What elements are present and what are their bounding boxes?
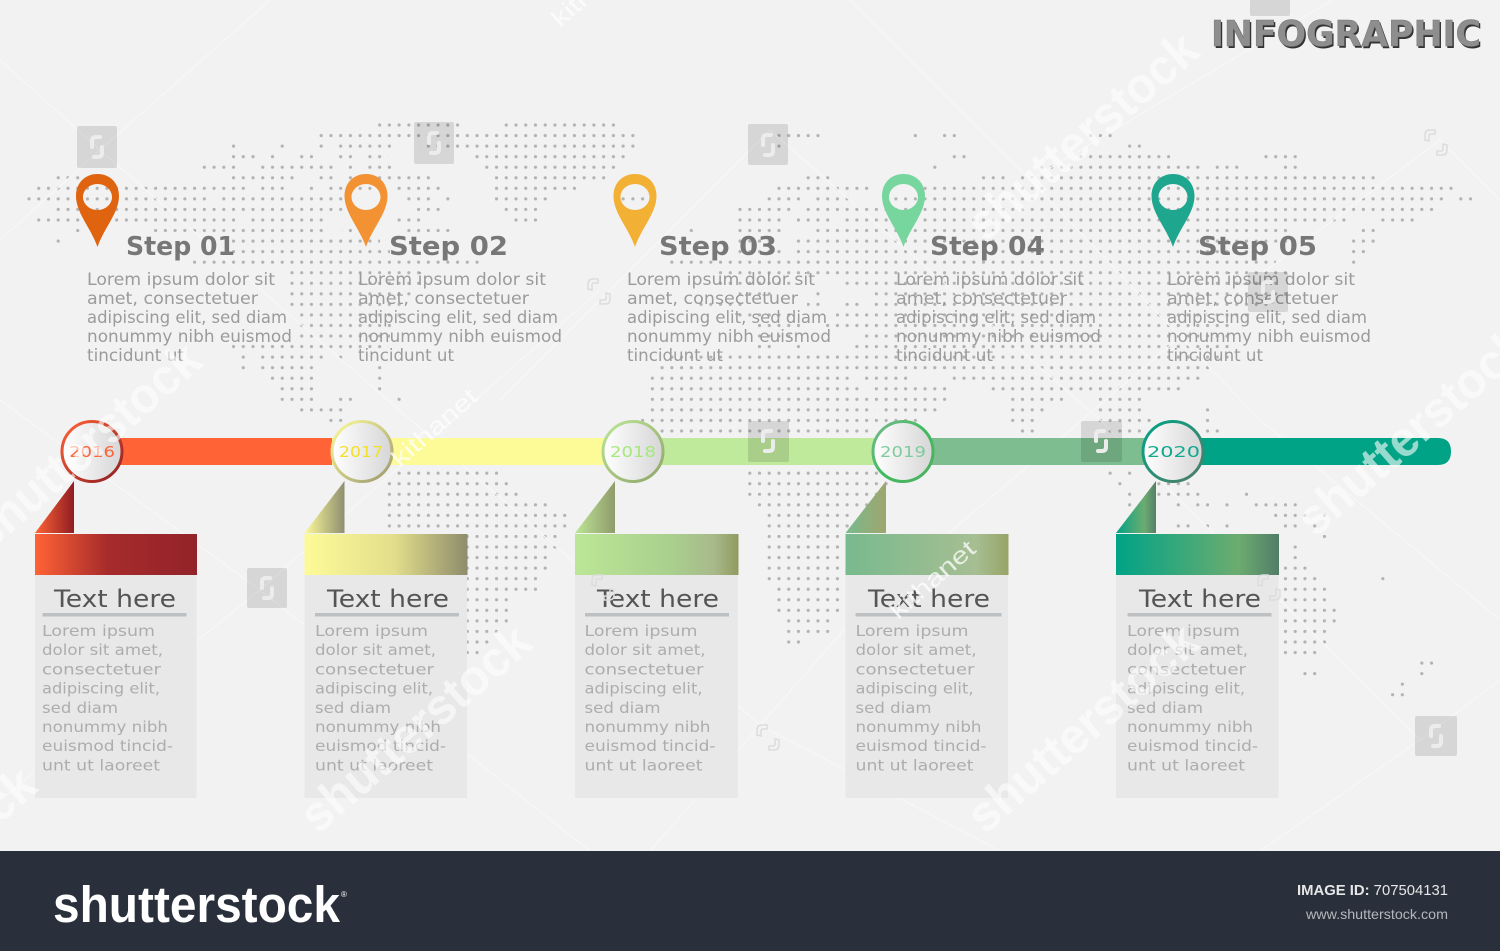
icon: pin 02 <box>344 174 388 247</box>
flag fold 2018 <box>575 481 615 533</box>
timeline marker 2017 <box>332 422 392 482</box>
card text 2016: euismod tincid- <box>42 737 173 755</box>
card text 2019: unt ut laoreet <box>856 756 974 774</box>
card body 2018 <box>575 575 738 798</box>
footer url: www.shutterstock.com <box>1305 906 1448 922</box>
text block: step 01 description: amet, consectetuer <box>87 289 258 308</box>
text block: step 05 description: amet, consectetuer <box>1167 289 1338 308</box>
footer logo: shutterstock <box>53 876 341 933</box>
text block: step 03 description: Lorem ipsum dolor sit <box>627 270 816 289</box>
heading: Step 05: Step 05 <box>1198 232 1317 262</box>
watermark squares <box>77 0 1457 756</box>
card text 2016: consectetuer <box>42 660 162 678</box>
card underline 2019 <box>856 613 1002 616</box>
card body 2017 <box>304 575 467 798</box>
timeline marker 2017: 2017 <box>339 443 383 461</box>
timeline marker 2016 <box>62 422 122 482</box>
card text 2017: unt ut laoreet <box>315 756 433 774</box>
flag fold 2017 <box>304 481 344 533</box>
text block: step 05 description: tincidunt ut <box>1167 346 1264 365</box>
text block: step 02 description <box>358 270 562 365</box>
card text 2016: adipiscing elit, <box>42 680 160 698</box>
card heading 2016: Text here <box>53 585 176 613</box>
timeline bar <box>92 438 1451 465</box>
card text 2016: unt ut laoreet <box>42 756 160 774</box>
card text 2020: dolor sit amet, <box>1127 641 1248 659</box>
card underline 2018 <box>585 613 729 616</box>
card text 2019: adipiscing elit, <box>856 680 974 698</box>
card text 2020: euismod tincid- <box>1127 737 1258 755</box>
heading: Step 03: Step 03 <box>659 232 777 262</box>
card heading 2017: Text here <box>326 585 449 613</box>
card text 2020: adipiscing elit, <box>1127 680 1245 698</box>
text block: step 02 description: adipiscing elit, sed diam <box>358 308 558 327</box>
card heading 2018: Text here <box>596 585 719 613</box>
text block: step 01 description <box>87 270 292 365</box>
card text 2017: sed diam <box>315 699 391 717</box>
timeline marker 2016: 2016 <box>69 443 115 461</box>
step 05 column <box>1152 174 1371 365</box>
text block: step 01 description: adipiscing elit, sed diam <box>87 308 287 327</box>
icon: pin 03 <box>614 174 656 247</box>
card text 2017 <box>315 622 446 774</box>
footer registered mark: ® <box>341 890 347 899</box>
card text 2018: sed diam <box>584 699 660 717</box>
card text 2016: dolor sit amet, <box>42 641 163 659</box>
watermark text: kithanet <box>884 535 981 625</box>
icon: pin 01 <box>76 174 119 247</box>
icon: pin 05 <box>1152 174 1194 247</box>
card text 2020 <box>1127 622 1258 774</box>
dotted world map <box>28 125 1472 695</box>
text block: step 04 description: tincidunt ut <box>896 346 994 365</box>
card text 2019: euismod tincid- <box>856 737 986 755</box>
heading: Step 02: Step 02 <box>389 232 508 262</box>
card text 2017: adipiscing elit, <box>315 680 433 698</box>
flag fold 2019 <box>846 481 886 533</box>
card text 2016: sed diam <box>42 699 118 717</box>
step 02 column <box>344 174 562 365</box>
watermark text: shutterstock <box>955 613 1209 843</box>
footer image id: IMAGE ID: 707504131 <box>1297 882 1448 899</box>
panel: card 2018 <box>575 481 738 798</box>
flag band 2016 <box>35 534 197 575</box>
text block: step 01 description: tincidunt ut <box>87 346 185 365</box>
text block: step 02 description: amet, consectetuer <box>358 289 529 308</box>
watermark text: shutterstock <box>288 613 542 843</box>
flag band 2017 <box>304 534 468 575</box>
card body 2016 <box>35 575 196 798</box>
footer band <box>0 851 1500 951</box>
text block: step 02 description: Lorem ipsum dolor sit <box>358 270 547 289</box>
card underline 2020 <box>1128 613 1272 616</box>
card body 2019 <box>846 575 1008 798</box>
card text 2018: dolor sit amet, <box>584 641 706 659</box>
card text 2017: consectetuer <box>315 660 435 678</box>
watermark square glyphs <box>92 133 1441 746</box>
timeline marker 2018: 2018 <box>610 443 656 461</box>
card text 2018: euismod tincid- <box>584 737 716 755</box>
flag fold 2020 <box>1116 481 1156 533</box>
text block: step 03 description: adipiscing elit, sed diam <box>627 308 827 327</box>
text block: step 01 description: Lorem ipsum dolor sit <box>87 270 276 289</box>
card text 2019: Lorem ipsum <box>856 622 968 640</box>
card text 2016 <box>42 622 173 774</box>
card text 2018: consectetuer <box>584 660 704 678</box>
card underline 2017 <box>315 613 459 616</box>
card heading 2019: Text here <box>867 585 990 613</box>
panel: card 2017 <box>304 481 468 798</box>
icon: pin 04 <box>882 174 925 247</box>
card text 2017: nonummy nibh <box>315 718 441 736</box>
card text 2018: unt ut laoreet <box>584 756 702 774</box>
text block: step 03 description: tincidunt ut <box>627 346 724 365</box>
title: INFOGRAPHIC: INFOGRAPHIC <box>1211 14 1481 55</box>
text block: step 03 description: amet, consectetuer <box>627 289 798 308</box>
text block: step 04 description: Lorem ipsum dolor sit <box>896 270 1085 289</box>
flag band 2018 <box>575 534 738 575</box>
text block: step 04 description <box>896 270 1101 365</box>
timeline marker 2018 <box>603 422 663 482</box>
card text 2017: euismod tincid- <box>315 737 446 755</box>
text block: step 03 description <box>627 270 831 365</box>
card text 2016: Lorem ipsum <box>42 622 155 640</box>
card text 2017: dolor sit amet, <box>315 641 436 659</box>
panel: card 2019 <box>846 481 1008 798</box>
flag fold 2016 <box>35 481 74 533</box>
text block: step 05 description: adipiscing elit, sed diam <box>1167 308 1367 327</box>
text block: step 02 description: nonummy nibh euismod <box>358 327 562 346</box>
text block: step 03 description: nonummy nibh euismod <box>627 327 831 346</box>
text block: step 05 description: nonummy nibh euismod <box>1167 327 1371 346</box>
timeline marker 2020: 2020 <box>1147 443 1200 461</box>
panel: card 2020 <box>1116 481 1279 798</box>
watermark text: shutterstock <box>955 21 1209 251</box>
text block: step 04 description: nonummy nibh euismod <box>896 327 1101 346</box>
card text 2018: nonummy nibh <box>584 718 710 736</box>
timeline marker 2019 <box>873 422 933 482</box>
step 04 column <box>882 174 1101 365</box>
text block: step 04 description: adipiscing elit, sed diam <box>896 308 1096 327</box>
card body 2020 <box>1116 575 1278 798</box>
flag band 2019 <box>846 534 1008 575</box>
heading: Step 04: Step 04 <box>930 232 1045 262</box>
timeline marker 2020 <box>1143 422 1203 482</box>
text block: step 01 description: nonummy nibh euismod <box>87 327 292 346</box>
text block: step 02 description: tincidunt ut <box>358 346 455 365</box>
flag band 2020 <box>1116 534 1279 575</box>
card text 2019: nonummy nibh <box>856 718 982 736</box>
card text 2020: unt ut laoreet <box>1127 756 1245 774</box>
card text 2019: sed diam <box>856 699 932 717</box>
title: INFOGRAPHIC: INFOGRAPHIC <box>1212 16 1482 57</box>
card text 2018: adipiscing elit, <box>584 680 702 698</box>
card underline 2016 <box>42 613 186 616</box>
card text 2018 <box>584 622 716 774</box>
card text 2020: nonummy nibh <box>1127 718 1253 736</box>
heading: Step 01: Step 01 <box>126 232 235 262</box>
card text 2017: Lorem ipsum <box>315 622 428 640</box>
text block: step 05 description: Lorem ipsum dolor sit <box>1167 270 1356 289</box>
timeline marker 2019: 2019 <box>880 443 926 461</box>
card text 2020: sed diam <box>1127 699 1203 717</box>
watermark text: kithanet <box>386 383 483 473</box>
step 03 column <box>614 174 831 365</box>
card text 2019: consectetuer <box>856 660 975 678</box>
card text 2018: Lorem ipsum <box>584 622 698 640</box>
text block: step 05 description <box>1167 270 1371 365</box>
card heading 2020: Text here <box>1138 585 1261 613</box>
watermark outline glyphs <box>588 130 1447 750</box>
panel: card 2016 <box>35 481 197 798</box>
card text 2016: nonummy nibh <box>42 718 168 736</box>
card text 2019: dolor sit amet, <box>856 641 976 659</box>
card text 2020: Lorem ipsum <box>1127 622 1240 640</box>
card text 2020: consectetuer <box>1127 660 1247 678</box>
step 01 column <box>76 174 292 365</box>
card text 2019 <box>856 622 986 774</box>
text block: step 04 description: amet, consectetuer <box>896 289 1067 308</box>
